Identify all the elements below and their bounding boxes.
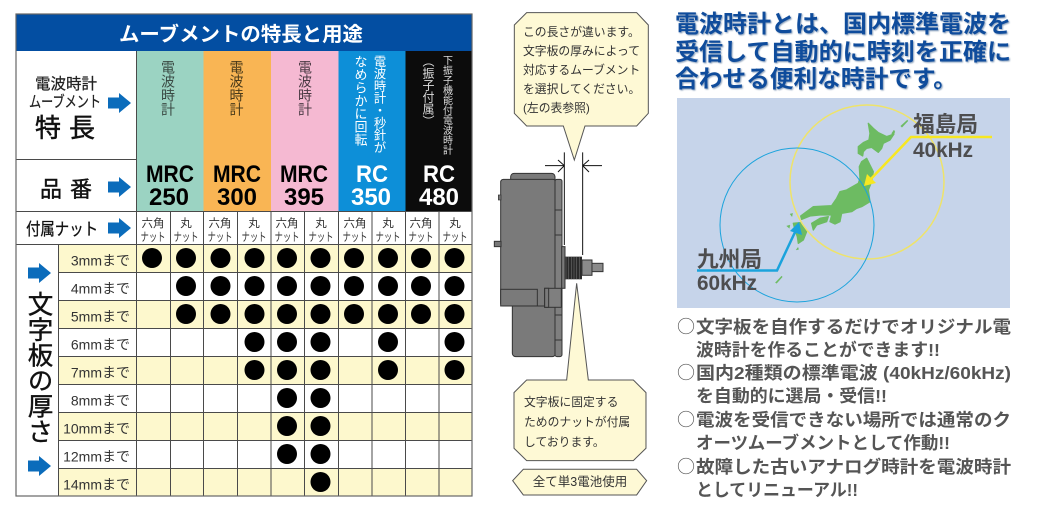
station label: Kyushu: 九州局 — [697, 247, 762, 272]
feature list: 波時計を作ることができます!! — [696, 340, 940, 360]
callout: length differs: 対応するムーブメント — [523, 63, 640, 77]
callout: nut included: しております。 — [524, 435, 605, 449]
column: MRC 395: MRC — [280, 161, 328, 188]
row: nut types: 六角 — [344, 217, 366, 230]
row: nut types: 丸 — [180, 217, 192, 230]
row label: features: 電波時計 — [35, 75, 97, 93]
row label: features: 特 長 — [35, 113, 95, 143]
row: nut types: ナット — [140, 230, 166, 244]
row: nut types: ナット — [376, 230, 400, 244]
column: RC 350 — [338, 51, 406, 211]
column: MRC 250 — [136, 51, 204, 211]
row: nut types: 六角 — [142, 217, 164, 230]
feature list: ○ — [677, 406, 695, 432]
thickness labels: 14mmまで — [63, 476, 130, 492]
feature list: オーツムーブメントとして作動!! — [696, 433, 950, 453]
row: nut types: 丸 — [315, 217, 327, 230]
column: RC 350: 電波時計・秒針が — [372, 55, 386, 153]
row: nut types: 丸 — [382, 217, 394, 230]
row label: part number: 品 番 — [40, 177, 92, 202]
callout: length differs: (左の表参照) — [523, 101, 590, 115]
heading: what is a radio clock — [675, 11, 1011, 93]
thickness labels: 10mmまで — [63, 420, 130, 436]
heading: what is a radio clock: 受信して自動的に時刻を正確に — [675, 39, 1011, 66]
thickness labels: 8mmまで — [71, 392, 130, 408]
row: nut types: ナット — [342, 230, 368, 244]
row: nut types: ナット — [274, 230, 300, 244]
table title banner: ムーブメントの特長と用途 — [119, 22, 363, 46]
column: RC 480: RC — [423, 161, 455, 188]
thickness labels: 12mmまで — [63, 448, 130, 464]
side label: dial thickness: 文字板の厚さ — [24, 291, 53, 444]
station label: Fukushima — [864, 112, 992, 186]
callout: length differs: 文字板の厚みによって — [523, 44, 640, 58]
row: nut types: ナット — [174, 230, 198, 244]
thickness labels: 6mmまで — [71, 336, 130, 352]
row: nut types: ナット — [308, 230, 334, 244]
station label: Kyushu — [697, 222, 802, 295]
column: MRC 395: 電波時計 — [297, 60, 313, 116]
callout: battery note — [513, 469, 647, 495]
column: MRC 250: 電波時計 — [160, 60, 176, 116]
feature list: ○ — [677, 453, 695, 479]
row: nut types: 六角 — [410, 217, 432, 230]
feature list: を自動的に選局・受信!! — [696, 386, 887, 406]
row label: part number — [40, 177, 131, 202]
column: RC 480 — [406, 51, 472, 211]
callout: nut included — [514, 283, 646, 461]
signal range: Kyushu — [720, 148, 874, 302]
column: MRC 300: 電波時計 — [228, 60, 244, 116]
row: nut types: ナット — [442, 230, 468, 244]
row: nut types — [140, 217, 468, 244]
heading: what is a radio clock: 電波時計とは、国内標準電波を — [675, 11, 1011, 38]
feature list: ○ — [677, 359, 695, 385]
thickness labels: 7mmまで — [71, 364, 130, 380]
side label: dial thickness — [24, 263, 53, 476]
callout: nut included: 文字板に固定する — [524, 395, 618, 409]
station label: Fukushima: 福島局 — [913, 112, 978, 137]
row: nut types: 六角 — [208, 217, 232, 230]
callout: battery note: 全て単3電池使用 — [533, 474, 627, 489]
panel: Japan signal map — [677, 98, 1010, 308]
row label: features: ムーブメント — [29, 92, 101, 111]
callout: length differs — [514, 13, 648, 160]
map of Japan — [775, 120, 908, 283]
row label: included nut: 付属ナット — [26, 220, 98, 239]
feature list: 国内2種類の標準電波 (40kHz/60kHz) — [696, 363, 1011, 383]
column: RC 350: なめらかに回転 — [352, 55, 368, 147]
table title banner — [16, 14, 472, 51]
row stripes — [58, 244, 472, 496]
column: MRC 250: 250 — [149, 184, 189, 211]
feature list: としてリニューアル!! — [696, 480, 858, 500]
callout: length differs: を選択してください。 — [523, 82, 640, 96]
row: nut types: ナット — [242, 230, 266, 244]
feature list — [677, 313, 1012, 500]
row: nut types: ナット — [408, 230, 434, 244]
row label: features — [29, 75, 131, 143]
column: MRC 300: MRC — [213, 161, 261, 188]
icon: clock movement side view — [494, 152, 603, 357]
station label: Kyushu: 60kHz — [697, 272, 757, 295]
compatibility dots — [142, 248, 464, 492]
row: nut types: ナット — [208, 230, 232, 244]
row: nut types: 丸 — [449, 217, 461, 230]
column: MRC 300: 300 — [217, 184, 257, 211]
signal range: Fukushima — [790, 105, 944, 259]
thickness labels — [63, 252, 130, 492]
heading: what is a radio clock: 合わせる便利な時計です。 — [675, 66, 957, 93]
column: RC 480: 下振子機能付電波時計 — [440, 55, 452, 156]
column: MRC 395 — [271, 51, 338, 211]
feature list: 故障した古いアナログ時計を電波時計 — [696, 457, 1012, 477]
thickness labels: 4mmまで — [71, 280, 130, 296]
callout: nut included: ためのナットが付属 — [524, 415, 630, 429]
thickness labels: 5mmまで — [71, 308, 130, 324]
column: MRC 395: 395 — [284, 184, 324, 211]
column: RC 350: 350 — [351, 184, 391, 211]
callout: length differs: この長さが違います。 — [523, 25, 640, 39]
column: RC 350: RC — [356, 161, 388, 188]
station label: Fukushima: 40kHz — [913, 139, 973, 162]
column: MRC 300 — [204, 51, 271, 211]
feature list: ○ — [677, 313, 695, 339]
thickness labels: 3mmまで — [71, 252, 130, 268]
feature list: 文字板を自作するだけでオリジナル電 — [696, 317, 1012, 337]
row: nut types: 六角 — [276, 217, 298, 230]
column: MRC 250: MRC — [146, 161, 194, 188]
column: RC 480: 480 — [419, 184, 459, 211]
column: RC 480: （振子付属） — [421, 55, 435, 127]
row: nut types: 丸 — [248, 217, 260, 230]
feature list: 電波を受信できない場所では通常のク — [696, 410, 1011, 430]
panel: movement feature table — [16, 14, 472, 496]
